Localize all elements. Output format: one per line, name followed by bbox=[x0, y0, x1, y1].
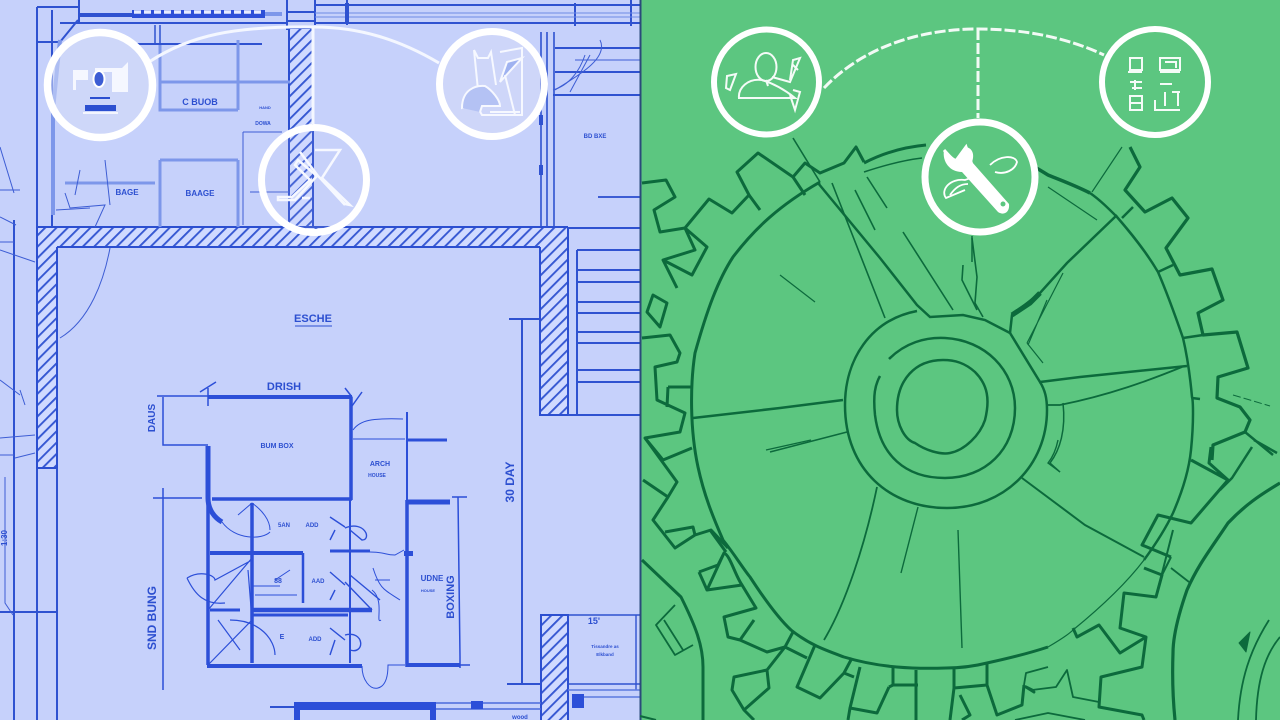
gear: teeth upper left bbox=[642, 147, 864, 720]
gear: teeth along the bottom bbox=[785, 632, 1024, 720]
dimension label: right: 30 DAY bbox=[503, 462, 517, 502]
icon: person in circle bbox=[714, 30, 819, 134]
icon: wrench and screwdriver in circle bbox=[925, 122, 1035, 232]
floor plan room labels: ADD bbox=[308, 637, 322, 643]
labels: upper rooms: C BUOB bbox=[182, 97, 218, 107]
floor plan bbox=[153, 382, 470, 690]
floor plan room labels: BOXING bbox=[445, 575, 457, 619]
connector: dashed network line bbox=[824, 29, 1104, 118]
icon: boot in circle bbox=[440, 32, 544, 136]
floor plan room labels: ADD bbox=[306, 523, 319, 529]
labels: upper rooms: BAGE bbox=[115, 188, 139, 197]
floor plan room labels: 88 bbox=[274, 578, 282, 585]
floor plan room labels: UDNE bbox=[421, 574, 444, 583]
panel: mechanical gears bbox=[640, 0, 1280, 720]
labels: upper rooms: Elkband bbox=[596, 652, 614, 657]
panel: architectural blueprint bbox=[0, 0, 640, 720]
icon: document symbols in circle bbox=[1102, 29, 1208, 135]
gear: main wheel rim bbox=[692, 145, 1193, 668]
floor plan room labels: DRISH bbox=[267, 381, 301, 393]
labels: upper rooms bbox=[115, 97, 619, 720]
floor plan room labels: BUM BOX bbox=[260, 443, 294, 450]
icon: crossed tools in circle bbox=[262, 128, 366, 232]
floor plan room labels: AAD bbox=[312, 579, 325, 585]
cracks and thin sketch lines bbox=[0, 40, 640, 615]
floor plan room labels: HOUSE bbox=[421, 588, 435, 593]
floor plan room labels: ARCH bbox=[370, 461, 390, 468]
connector: blueprint network line bbox=[149, 27, 439, 124]
labels: upper rooms: HAND bbox=[259, 105, 271, 110]
floor plan room labels: DAUS bbox=[147, 404, 158, 432]
floor plan room labels: E bbox=[280, 634, 285, 641]
labels: upper rooms: Tissandre as bbox=[591, 644, 619, 649]
structural blueprint lines bbox=[0, 0, 640, 720]
gear: neighbouring wheel bottom left bbox=[640, 560, 703, 720]
floor plan room labels: SND BUNG bbox=[145, 586, 159, 650]
labels: upper rooms: DOWA bbox=[255, 121, 271, 127]
gear: spokes bbox=[693, 138, 1187, 648]
floor plan room labels bbox=[145, 381, 457, 650]
hatched walls bbox=[37, 28, 568, 720]
icon: camera in circle bbox=[48, 32, 152, 138]
gear: main wheel hub bbox=[845, 311, 1047, 508]
gear: teeth upper right bbox=[1122, 147, 1277, 490]
labels: upper rooms: BD BXE bbox=[584, 134, 606, 140]
gear: teeth bottom right bbox=[1015, 447, 1228, 720]
light room partitions bbox=[53, 40, 290, 227]
labels: upper rooms: BAAGE bbox=[186, 189, 215, 198]
floor plan room labels: HOUSE bbox=[368, 473, 387, 479]
label: centre room title: ESCHE bbox=[294, 313, 332, 325]
panel divider bbox=[640, 0, 642, 720]
labels: upper rooms: 15' bbox=[588, 616, 600, 626]
floor plan room labels: 5AN bbox=[278, 523, 290, 529]
gear: neighbouring wheel bottom right bbox=[1171, 483, 1280, 720]
dimension label: far left: 1:30 bbox=[0, 529, 9, 546]
